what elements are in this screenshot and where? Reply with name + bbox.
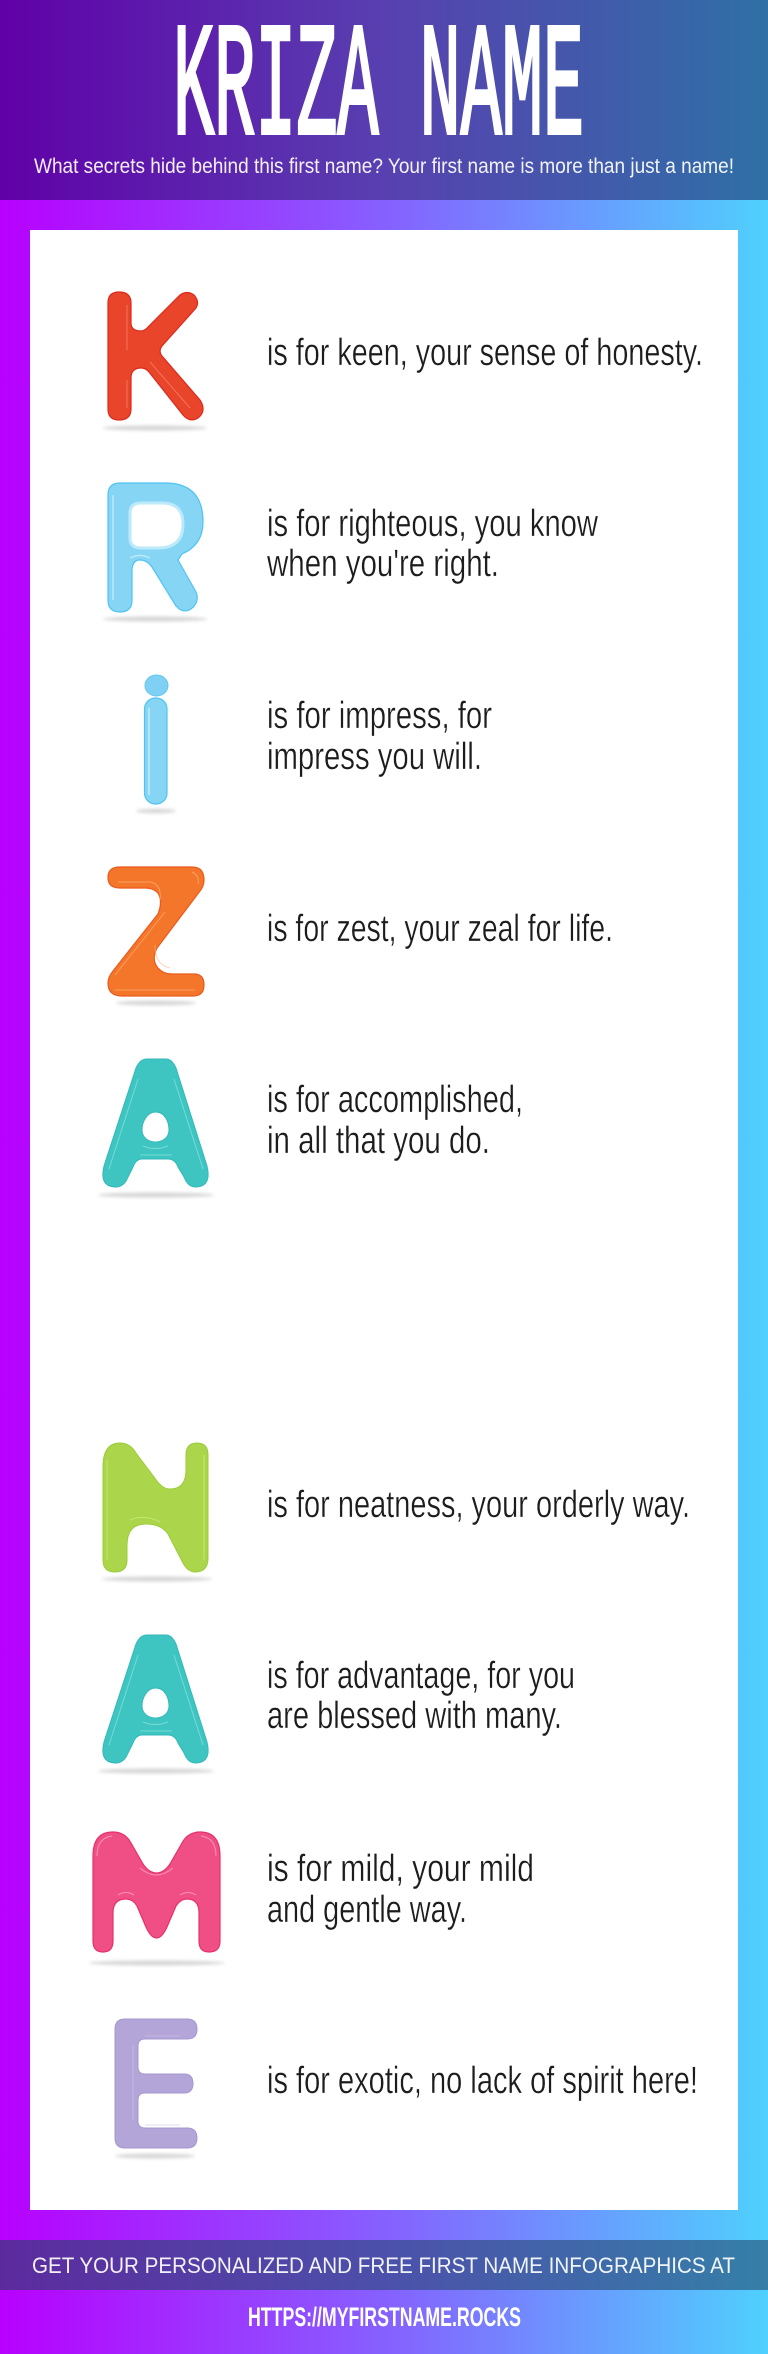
text: R lines: is for righteous, you know [267,503,598,545]
white content panel [30,230,738,2210]
header band [0,0,768,200]
icon: letter A [98,1059,214,1198]
text: second A lines: is for advantage, for you [267,1655,575,1697]
text: M lines: and gentle way. [267,1889,467,1931]
footer band [0,2240,768,2290]
text: R lines [266,503,598,585]
footer text: GET YOUR PERSONALIZED AND FREE FIRST NAME INFOGRAPHICS AT [32,2253,735,2278]
icon: letter M [89,1832,225,1966]
footer url: HTTPS://MYFIRSTNAME.ROCKS [248,2302,521,2332]
text: M lines: is for mild, your mild [267,1848,534,1890]
text: second A lines [267,1655,575,1737]
icon: letter A (second) [98,1635,214,1774]
text: A lines: in all that you do. [267,1120,490,1162]
icon: letter i [136,675,176,813]
text: M lines [267,1848,534,1931]
text: A lines: is for accomplished, [267,1079,523,1121]
icon: letter E [115,2019,197,2158]
text: i lines [267,695,492,778]
text: A lines [267,1079,523,1162]
text: R lines: when you're right. [266,543,499,585]
icon: letter N [102,1443,212,1582]
icon: letter R [103,483,207,622]
icon: letter Z [108,867,204,1006]
text: i lines: impress you will. [267,736,482,778]
text: Z line: is for zest, your zeal for life. [267,908,613,950]
text: i lines: is for impress, for [267,695,492,737]
text: second A lines: are blessed with many. [267,1695,562,1737]
icon: letter K [103,292,207,430]
